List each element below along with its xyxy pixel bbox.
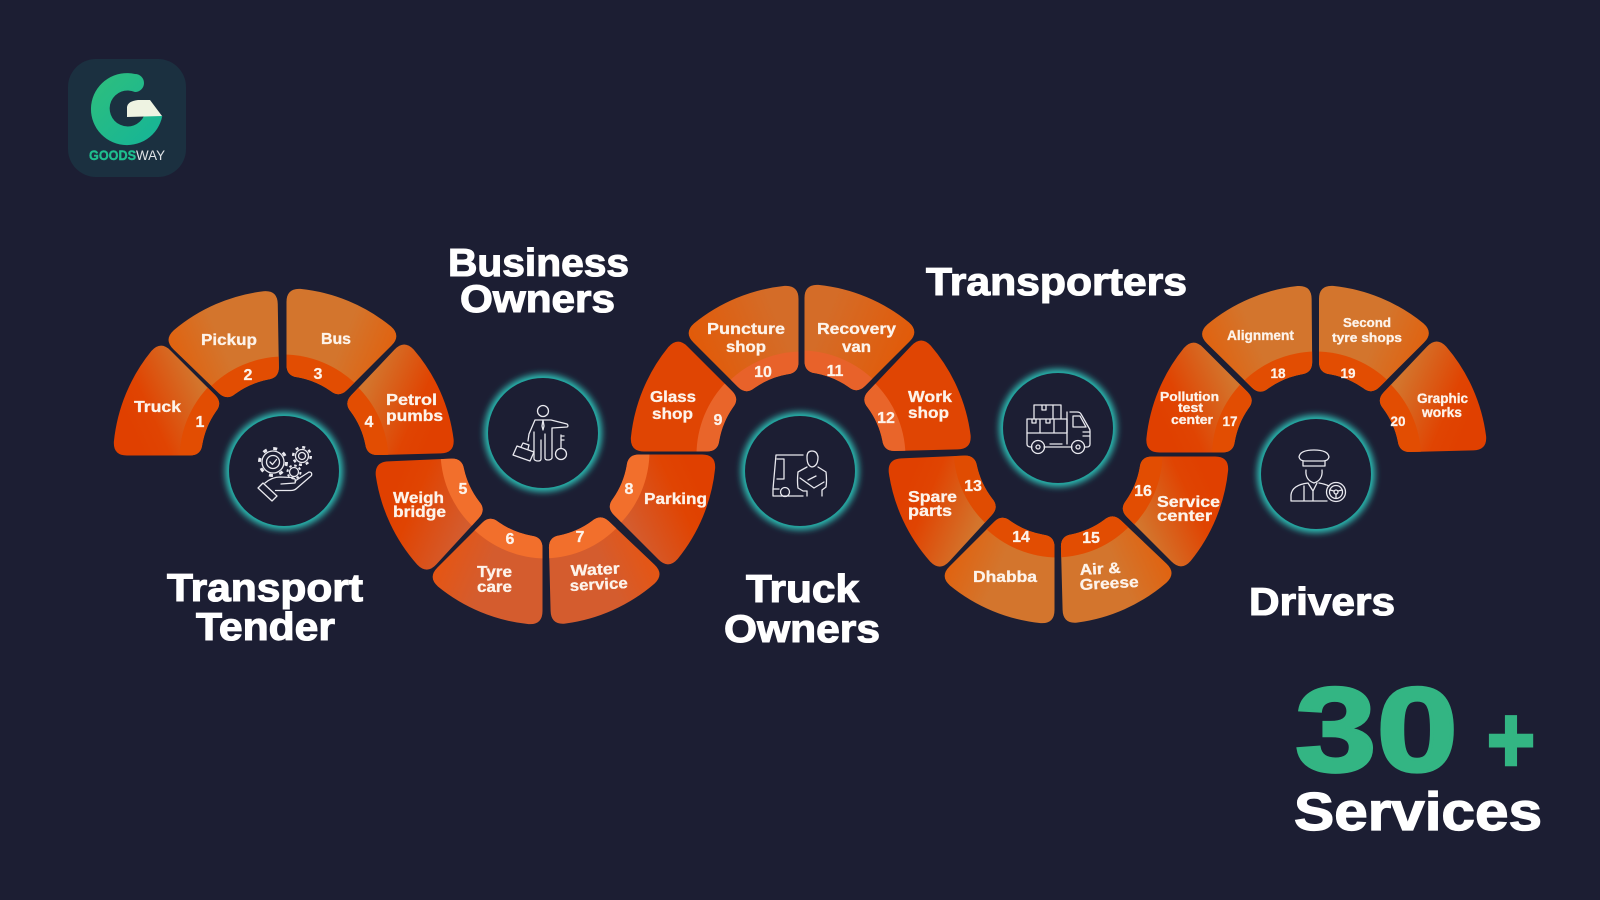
segment 17: Pollution test center <box>1146 342 1252 452</box>
callout: 30+ Services: Services <box>1294 782 1542 842</box>
segment 10: Puncture shop: Puncture <box>707 321 785 338</box>
segment 8: Parking: Parking <box>644 491 707 508</box>
segment 17: Pollution test center: Pollution <box>1160 389 1219 404</box>
segment 16: Service center <box>1122 456 1228 566</box>
segment 4: Petrol pumbs: Petrol <box>386 392 437 409</box>
segment 19: Second tyre shops <box>1319 286 1429 392</box>
segment 20: Graphic works: Graphic <box>1417 391 1468 406</box>
segment 17: Pollution test center: test <box>1178 400 1204 415</box>
arc: Business Owners services <box>376 454 716 624</box>
callout: 30+ Services <box>1294 663 1542 842</box>
segment 5: Weigh bridge <box>376 458 483 570</box>
segment 12: Work shop <box>864 340 971 451</box>
segment 20: Graphic works <box>1380 342 1486 452</box>
segment 13: Spare parts: 13 <box>964 478 982 495</box>
segment 14: Dhabba <box>944 518 1054 624</box>
segment 16: Service center: 16 <box>1134 483 1152 500</box>
heading: Truck Owners <box>724 568 880 651</box>
logo: Goodsway <box>68 59 186 177</box>
segment 4: Petrol pumbs <box>347 344 454 455</box>
segment 7: Water service <box>548 517 660 624</box>
segment 4: Petrol pumbs: pumbs <box>386 408 443 425</box>
segment 13: Spare parts <box>888 456 996 567</box>
segment 16: Service center: center <box>1157 508 1212 525</box>
logo: Goodsway: WAY <box>136 147 166 163</box>
segment 6: Tyre care: 6 <box>506 531 515 548</box>
segment 13: Spare parts: Spare <box>908 489 957 506</box>
segment 3: Bus: 3 <box>314 366 323 383</box>
segment 15: Air & Greese: Air & <box>1079 560 1121 579</box>
heading: Transport Tender: Transport <box>167 567 363 610</box>
segment 6: Tyre care <box>432 518 542 624</box>
icon circle: Truck Owners man and truck <box>741 412 859 530</box>
icon circle: Drivers chauffeur with steering wheel <box>1257 415 1375 533</box>
segment 12: Work shop: 12 <box>877 410 895 427</box>
segment 18: Alignment: 18 <box>1270 366 1286 381</box>
icon circle: Transport Tender gears and hand <box>225 412 343 530</box>
segment 8: Parking: 8 <box>625 481 634 498</box>
arc: Transporters services <box>888 456 1228 624</box>
segment 19: Second tyre shops: Second <box>1343 315 1391 330</box>
callout: 30+ Services: + <box>1487 687 1535 792</box>
segment 4: Petrol pumbs: 4 <box>365 414 374 431</box>
heading: Transport Tender <box>167 567 363 649</box>
segment 10: Puncture shop: 10 <box>754 364 772 381</box>
segment 6: Tyre care: Tyre <box>477 564 512 581</box>
segment 11: Recovery van: van <box>842 339 871 356</box>
heading: Drivers: Drivers <box>1249 581 1395 624</box>
segment 2: Pickup: 2 <box>244 367 253 384</box>
segment 1: Truck: Truck <box>134 399 181 416</box>
heading: Transporters: Transporters <box>926 261 1187 304</box>
arc: Transport Tender services <box>114 288 454 456</box>
segment 9: Glass shop: shop <box>652 406 693 423</box>
segment 2: Pickup <box>168 291 279 398</box>
segment 15: Air & Greese: Greese <box>1079 574 1140 594</box>
icon circle: Transporters delivery truck <box>999 369 1117 487</box>
segment 9: Glass shop: 9 <box>714 412 723 429</box>
segment 11: Recovery van <box>804 284 914 390</box>
segment 8: Parking <box>610 454 716 564</box>
segment 11: Recovery van: Recovery <box>817 321 896 338</box>
arc: Drivers services <box>1146 286 1486 452</box>
heading: Truck Owners: Owners <box>724 608 880 651</box>
segment 3: Bus: Bus <box>321 331 351 348</box>
segment 19: Second tyre shops: tyre shops <box>1332 330 1402 345</box>
segment 1: Truck: 1 <box>196 414 205 431</box>
callout: 30+ Services: 30 <box>1295 663 1458 797</box>
segment 16: Service center: Service <box>1157 494 1220 511</box>
segment 15: Air & Greese <box>1060 516 1172 623</box>
segment 17: Pollution test center: center <box>1171 412 1213 427</box>
segment 14: Dhabba: Dhabba <box>973 569 1037 586</box>
arc: Truck Owners services <box>630 284 971 452</box>
segment 10: Puncture shop <box>688 286 798 392</box>
segment 5: Weigh bridge: Weigh <box>393 490 444 507</box>
heading: Business Owners <box>448 242 629 321</box>
segment 18: Alignment: Alignment <box>1227 327 1294 343</box>
segment 6: Tyre care: care <box>477 579 512 596</box>
segment 12: Work shop: Work <box>908 389 952 406</box>
heading: Transport Tender: Tender <box>196 606 335 649</box>
segment 5: Weigh bridge: 5 <box>459 481 468 498</box>
segment 9: Glass shop <box>630 342 736 452</box>
segment 1: Truck <box>114 346 220 456</box>
segment 10: Puncture shop: shop <box>726 339 766 356</box>
segment 12: Work shop: shop <box>908 405 949 422</box>
icon circle: Business Owners person with briefcase and key <box>484 374 602 492</box>
segment 7: Water service: 7 <box>576 529 585 546</box>
segment 2: Pickup: Pickup <box>201 332 257 349</box>
segment 19: Second tyre shops: 19 <box>1340 366 1356 381</box>
segment 20: Graphic works: 20 <box>1390 414 1406 429</box>
segment 5: Weigh bridge: bridge <box>393 504 446 521</box>
segment 3: Bus <box>286 288 396 394</box>
segment 17: Pollution test center: 17 <box>1222 414 1238 429</box>
heading: Business Owners: Owners <box>460 278 615 321</box>
heading: Truck Owners: Truck <box>746 568 860 611</box>
segment 9: Glass shop: Glass <box>650 389 696 406</box>
segment 7: Water service: service <box>569 575 629 595</box>
segment 13: Spare parts: parts <box>908 503 952 520</box>
segment 11: Recovery van: 11 <box>827 363 844 380</box>
segment 15: Air & Greese: 15 <box>1082 530 1100 547</box>
heading: Business Owners: Business <box>448 242 629 285</box>
segment 7: Water service: Water <box>570 560 620 580</box>
logo: Goodsway: GOODS <box>89 147 136 163</box>
segment 14: Dhabba: 14 <box>1012 529 1030 546</box>
segment 18: Alignment <box>1202 286 1312 392</box>
segment 20: Graphic works: works <box>1421 405 1462 420</box>
